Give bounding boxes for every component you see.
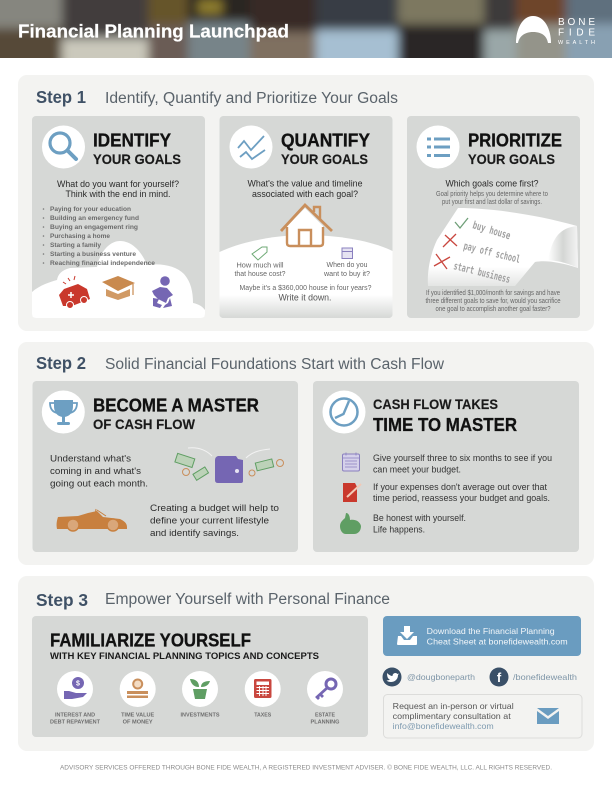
goal list: Paying for your education bbox=[50, 206, 131, 213]
contact text: complimentary consultation at bbox=[393, 711, 511, 721]
goal list: Starting a family bbox=[50, 242, 101, 249]
item: buy house bbox=[471, 219, 512, 242]
text: be honest bbox=[373, 513, 466, 534]
heading: FAMILIARIZE YOURSELF bbox=[50, 631, 251, 651]
cost question: How much will bbox=[236, 263, 284, 270]
cost question bbox=[234, 263, 286, 278]
topic: estate: PLANNING bbox=[310, 719, 340, 725]
heading: IDENTIFY bbox=[93, 130, 171, 150]
icon: money flow bbox=[175, 448, 284, 483]
question: Which goals come first? bbox=[446, 179, 538, 190]
topic: taxes bbox=[245, 671, 281, 718]
heading: TIME TO MASTER bbox=[373, 415, 517, 435]
text: expenses bbox=[373, 482, 550, 503]
timing question: When do you bbox=[326, 262, 368, 269]
icon: list bbox=[416, 126, 460, 168]
topic: estate: ESTATE bbox=[315, 712, 335, 718]
card: identify bbox=[32, 116, 205, 318]
heading: PRIORITIZE bbox=[468, 130, 562, 150]
logo: BONE bbox=[558, 17, 595, 28]
paper list bbox=[428, 208, 578, 286]
text: budget bbox=[150, 503, 279, 539]
icon: price tag bbox=[252, 247, 267, 260]
example text: If you identified $1,000/month for savings and have bbox=[426, 290, 560, 297]
button text: Cheat Sheet at bonefidewealth.com bbox=[427, 636, 568, 646]
text: understand: Understand what's bbox=[50, 454, 131, 465]
text: budget: and identify savings. bbox=[150, 528, 239, 539]
panel: step 1 bbox=[18, 75, 594, 331]
text: give yourself: can meet your budget. bbox=[373, 464, 461, 474]
step 3 heading: Step 3 bbox=[36, 590, 88, 610]
social: twitter: @dougboneparth bbox=[407, 672, 475, 682]
icon: baby bbox=[152, 276, 173, 308]
question bbox=[57, 179, 179, 200]
social: facebook: f bbox=[497, 670, 502, 685]
item: pay off school bbox=[462, 240, 521, 266]
icon: thumbs up bbox=[340, 513, 361, 534]
goal list bbox=[43, 206, 155, 267]
explanation: put your first and last dollar of savings. bbox=[442, 199, 542, 206]
icon: convertible car bbox=[57, 509, 127, 531]
blurred photo background bbox=[0, 0, 612, 58]
goal list: Building an emergency fund bbox=[50, 215, 139, 222]
check bbox=[455, 218, 468, 228]
step 3 subtitle: Empower Yourself with Personal Finance bbox=[105, 591, 390, 608]
topic: investments: INVESTMENTS bbox=[180, 712, 220, 718]
question: associated with each goal? bbox=[252, 189, 358, 200]
topic: interest: DEBT REPAYMENT bbox=[50, 719, 101, 725]
text: understand: coming in and what's bbox=[50, 466, 141, 477]
topic: interest bbox=[50, 671, 101, 725]
subheading: CASH FLOW TAKES bbox=[373, 396, 498, 412]
footer disclaimer: ADVISORY SERVICES OFFERED THROUGH BONE FIDE WEALTH, A REGISTERED INVESTMENT ADVISER. © BONE FIDE WEALTH, LLC. ALL RIGHTS RESERVED. bbox=[60, 764, 552, 772]
download button bbox=[383, 616, 581, 656]
goal list: Buying an engagement ring bbox=[50, 224, 138, 231]
cross bbox=[434, 254, 450, 269]
icon: calendar bbox=[342, 248, 352, 258]
text: be honest: Be honest with yourself. bbox=[373, 513, 466, 523]
logo: FIDE bbox=[558, 28, 595, 38]
topic: interest: INTEREST AND bbox=[55, 712, 95, 718]
contact text: Request an in-person or virtual bbox=[393, 701, 514, 711]
timing question: want to buy it? bbox=[323, 271, 370, 278]
goal list: Starting a business venture bbox=[50, 251, 136, 258]
goal list: Purchasing a home bbox=[50, 233, 110, 240]
step 2 subtitle: Solid Financial Foundations Start with Cash Flow bbox=[105, 356, 445, 373]
write it down: Write it down. bbox=[278, 293, 332, 303]
topic: estate bbox=[307, 671, 343, 725]
panel: step 2 bbox=[18, 342, 594, 565]
card: quantify bbox=[220, 116, 392, 318]
step 1 heading: Step 1 bbox=[36, 87, 86, 107]
goal list: Reaching financial independence bbox=[50, 260, 155, 267]
cloud bbox=[32, 241, 205, 318]
heading: BECOME A MASTER bbox=[93, 396, 259, 416]
subheading: YOUR GOALS bbox=[468, 151, 555, 167]
logo: WEALTH bbox=[558, 40, 595, 46]
example text: three different goals to save for, would you sacrifice bbox=[426, 298, 561, 305]
example text bbox=[426, 290, 561, 313]
cost question: that house cost? bbox=[234, 271, 286, 278]
item: start business bbox=[452, 260, 511, 286]
card: prioritize bbox=[407, 116, 580, 318]
icon: envelope bbox=[537, 708, 559, 724]
icon: clock bbox=[322, 390, 366, 434]
icon: trend line bbox=[230, 126, 272, 168]
icon: trophy bbox=[42, 390, 85, 434]
topic: interest: $ bbox=[76, 680, 80, 688]
text: expenses: time period, reassess your budget and goals. bbox=[373, 493, 550, 503]
contact text: info@bonefidewealth.com bbox=[393, 721, 494, 731]
button text: Download the Financial Planning bbox=[427, 626, 555, 636]
example text: one goal to accomplish another goal faster? bbox=[436, 306, 551, 313]
text: give yourself: Give yourself three to six months to see if you bbox=[373, 453, 552, 463]
header banner bbox=[0, 0, 612, 58]
contact box bbox=[384, 694, 582, 738]
text: understand: going out each month. bbox=[50, 478, 148, 490]
social: facebook bbox=[490, 668, 577, 686]
logo bbox=[516, 16, 595, 46]
card: cash flow master bbox=[32, 381, 298, 552]
question: Think with the end in mind. bbox=[66, 189, 170, 200]
card: time to master bbox=[313, 381, 579, 552]
text: budget: define your current lifestyle bbox=[150, 516, 269, 526]
panel: step 3 bbox=[18, 576, 594, 751]
heading: QUANTIFY bbox=[281, 130, 370, 150]
subheading: OF CASH FLOW bbox=[93, 416, 196, 432]
title: Financial Planning Launchpad bbox=[18, 20, 289, 42]
topic: time value bbox=[120, 671, 156, 725]
icon: magnifier bbox=[42, 126, 85, 168]
text: be honest: Life happens. bbox=[373, 524, 425, 534]
question bbox=[248, 179, 362, 200]
explanation bbox=[436, 191, 548, 206]
topic: time value: TIME VALUE bbox=[121, 712, 155, 718]
explanation: Goal priority helps you determine where to bbox=[436, 191, 548, 198]
icon: house bbox=[281, 205, 332, 246]
contact text bbox=[393, 701, 514, 731]
text: expenses: If your expenses don't average out over that bbox=[373, 482, 548, 492]
subheading: WITH KEY FINANCIAL PLANNING TOPICS AND CONCEPTS bbox=[50, 651, 319, 661]
text: give yourself bbox=[373, 453, 552, 474]
social: twitter bbox=[382, 668, 475, 686]
topic: investments bbox=[180, 671, 220, 718]
icon: download bbox=[397, 626, 417, 645]
cross bbox=[443, 234, 457, 247]
topic: time value: OF MONEY bbox=[123, 719, 153, 725]
subheading: YOUR GOALS bbox=[281, 151, 368, 167]
white dome bbox=[220, 235, 392, 318]
topic: taxes: TAXES bbox=[254, 712, 272, 718]
social: facebook: /bonefidewealth bbox=[513, 672, 577, 682]
step 1 subtitle: Identify, Quantify and Prioritize Your Goals bbox=[105, 90, 398, 107]
subheading: YOUR GOALS bbox=[93, 151, 181, 167]
text: budget: Creating a budget will help to bbox=[150, 503, 279, 514]
example text: Maybe it's a $360,000 house in four years? bbox=[240, 285, 372, 292]
step 2 heading: Step 2 bbox=[36, 353, 86, 373]
icon: calendar bbox=[342, 452, 360, 471]
icon: graduation cap bbox=[102, 276, 135, 300]
card: familiarize bbox=[32, 616, 368, 737]
icon: red document with pen bbox=[343, 483, 361, 502]
text: understand bbox=[50, 454, 148, 490]
question: What's the value and timeline bbox=[248, 179, 362, 190]
button text bbox=[427, 626, 568, 646]
timing question bbox=[323, 262, 370, 278]
question: What do you want for yourself? bbox=[57, 179, 179, 190]
icon: ambulance bbox=[59, 276, 90, 308]
